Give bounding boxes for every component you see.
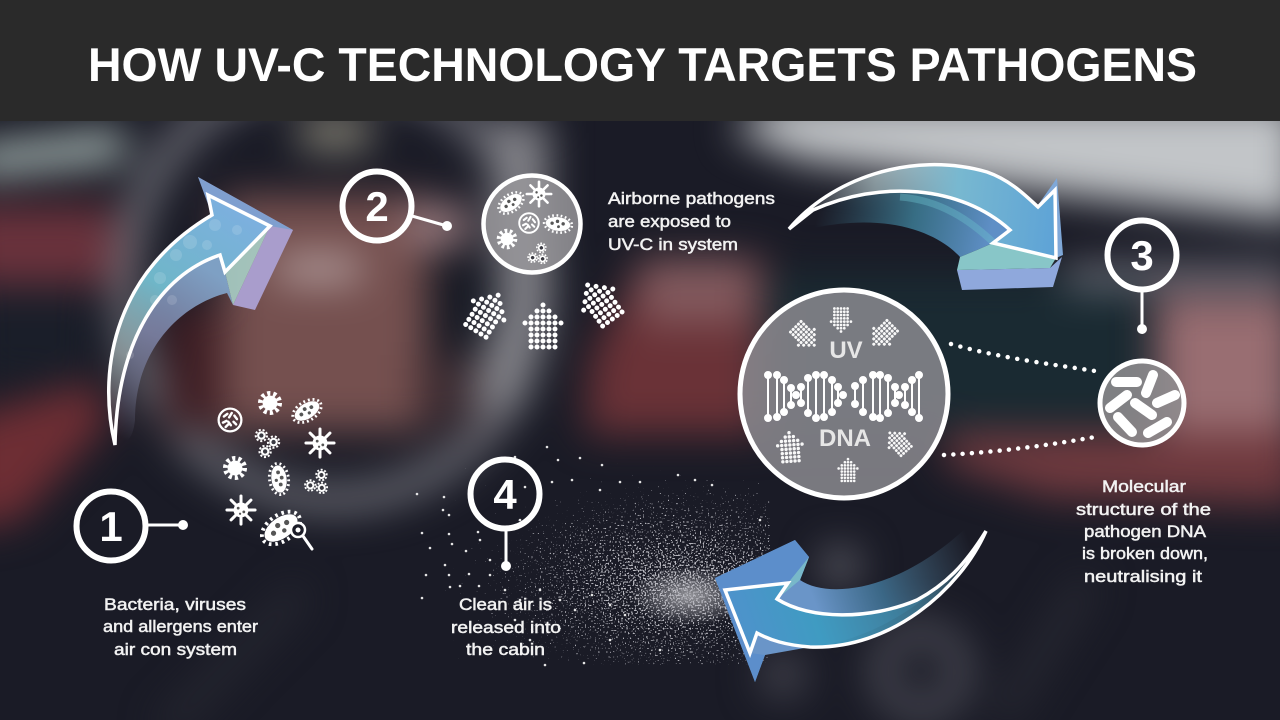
text: step 1 caption [103, 596, 259, 659]
connector: dotted lines [944, 344, 1095, 455]
badge: number 3: 3 [1130, 232, 1154, 279]
arrow: curved arrow from step 1 to step 2 [109, 177, 293, 445]
icon: bacteria circle [1100, 361, 1184, 445]
badge: number 1: 1 [99, 503, 123, 550]
icon: pathogen cluster [219, 393, 334, 551]
text: step 3 caption: Molecular [1102, 478, 1187, 496]
icon: UV arrows [777, 308, 914, 481]
badge: number 4: 4 [493, 471, 517, 518]
text: step 1 caption: and allergens enter [103, 618, 259, 636]
badge: number 1 [76, 492, 188, 560]
badge: number 2: 2 [365, 183, 389, 230]
step 3: DNA breakdown [740, 220, 1211, 586]
text: step 2 caption [608, 190, 775, 254]
text: step 2 caption: UV-C in system [608, 236, 738, 254]
text: step 3 caption: is broken down, [1082, 545, 1208, 563]
diagram: UV and DNA circle [740, 290, 948, 498]
icon: dotted UV arrows [461, 274, 627, 347]
arrow: curved arrow from step 2 to step 3 [789, 165, 1063, 290]
text: step 4 caption: Clean air is [459, 596, 552, 614]
step 1: incoming pathogens [76, 177, 334, 659]
step 4: clean air [417, 447, 770, 665]
text: step 3 caption: neutralising it [1084, 568, 1202, 586]
icon: pathogens in circle [484, 176, 580, 272]
title: HOW UV-C TECHNOLOGY TARGETS PATHOGENS [88, 38, 1197, 91]
text: step 3 caption: structure of the [1076, 501, 1211, 519]
badge: number 3 [1108, 220, 1176, 334]
icon: DNA helix [768, 375, 919, 418]
label: DNA: DNA [819, 425, 871, 452]
text: step 4 caption [451, 596, 561, 659]
particles: clean air spray [417, 447, 770, 665]
label: UV: UV [829, 337, 863, 364]
text: step 4 caption: released into [451, 619, 561, 637]
text: step 1 caption: air con system [114, 641, 237, 659]
text: step 2 caption: Airborne pathogens [608, 190, 775, 208]
text: step 2 caption: are exposed to [608, 213, 731, 231]
text: step 4 caption: the cabin [466, 641, 545, 659]
step 2: exposure to UV-C [342, 172, 775, 347]
header bar [0, 0, 1280, 121]
badge: number 4 [470, 460, 540, 571]
text: step 3 caption [1076, 478, 1211, 586]
text: step 1 caption: Bacteria, viruses [104, 596, 246, 614]
arrow: curved arrow from step 4 back to step 1 [715, 527, 986, 682]
text: step 3 caption: pathogen DNA [1084, 523, 1206, 541]
badge: number 2 [342, 172, 452, 240]
